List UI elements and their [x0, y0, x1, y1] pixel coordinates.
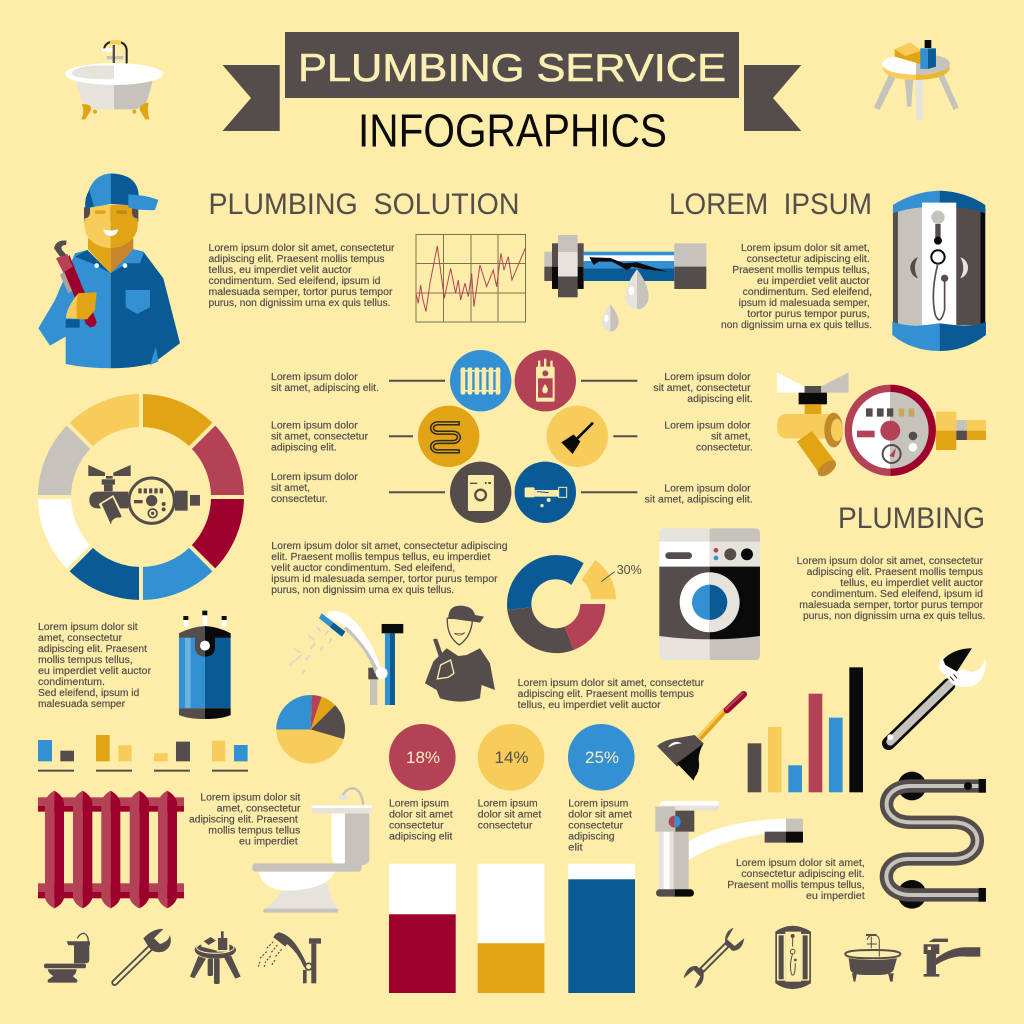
- text: center paragraph: purus, non dignissim urna ex quis tellus.: [271, 585, 454, 596]
- text: left spoke labels: Lorem ipsum dolor: [271, 421, 358, 432]
- stat: 18 percent: [389, 724, 456, 993]
- heading: plumbing: PLUMBING: [838, 502, 985, 535]
- title banner: [222, 32, 801, 131]
- text: right spoke labels: sit amet, adipiscing elit.: [645, 495, 753, 506]
- heading: lorem ipsum: LOREM IPSUM: [669, 188, 872, 221]
- text: water tank paragraph: malesuada semper: [38, 699, 126, 710]
- stat: 25 percent: Lorem ipsum: [568, 799, 628, 810]
- text: plumbing body: adipiscing elit. Praesent mollis tempus: [807, 567, 983, 578]
- icon: colored water meter: [777, 372, 986, 479]
- text: left spoke labels: sit amet,: [271, 483, 310, 494]
- icon: shower cabin: [892, 191, 986, 351]
- dark icon: stool: [190, 931, 241, 984]
- dark icon: faucet: [924, 939, 980, 977]
- stat: 18 percent: Lorem ipsum: [389, 799, 449, 810]
- text: plumbing solution body: Lorem ipsum dolor sit amet, consectetur: [208, 243, 395, 254]
- icon: towel rail: [886, 772, 986, 909]
- icon circle: leaking pipe: [515, 462, 576, 523]
- text: toilet paragraph: amet, consectetur: [217, 804, 301, 815]
- text: plumbing solution body: adipiscing elit. Praesent mollis tempus: [208, 254, 384, 265]
- text: left spoke labels: sit amet, adipiscing elit.: [271, 383, 379, 394]
- text: left spoke labels: consectetur.: [271, 494, 328, 505]
- ring segments: [34, 390, 248, 604]
- text: faucet paragraph: eu imperdiet: [806, 891, 865, 902]
- icon: plunger: [657, 693, 744, 781]
- dark icon: adjustable wrench: [115, 929, 171, 983]
- icon: hand shower: [290, 611, 403, 705]
- text: plumbing body: tellus, eu imperdiet velit auctor: [840, 578, 984, 589]
- icon circle: washing machine: [450, 462, 511, 523]
- stat: 14 percent: [478, 724, 544, 993]
- text: center paragraph: ipsum id malesuada semper, tortor purus tempor: [271, 574, 498, 585]
- text: lorem ipsum body: Lorem ipsum dolor sit amet,: [741, 243, 870, 254]
- text: right spoke labels: sit amet, consectetur: [653, 383, 751, 394]
- icon: water tank: [179, 611, 231, 719]
- icon: plumber woman dark: [425, 606, 495, 702]
- text: plumbing solution body: purus, non dignissim urna ex quis tellus.: [208, 298, 390, 309]
- title banner: PLUMBING SERVICE: [298, 47, 726, 90]
- text: water tank paragraph: condimentum.: [38, 677, 105, 688]
- text: plumbing solution body: malesuada semper, tortor purus tempor: [208, 287, 393, 298]
- panel: ring chart with meter: [34, 390, 248, 604]
- text: plumbing body: purus, non dignissim urna ex quis tellus.: [803, 611, 985, 622]
- text: lorem ipsum body: consectetur adipiscing elit.: [747, 254, 870, 265]
- heading: plumbing solution: PLUMBING SOLUTION: [208, 188, 520, 221]
- text: right spoke labels: Lorem ipsum dolor: [664, 372, 751, 383]
- neck: [88, 238, 133, 273]
- line chart: [416, 234, 526, 322]
- icon: leaking pipe: [544, 235, 706, 332]
- text: right spoke labels: sit amet,: [711, 432, 751, 443]
- icon: washing machine: [659, 528, 760, 660]
- text: center paragraph: [271, 541, 508, 596]
- stat: 18 percent: consectetur: [389, 821, 444, 832]
- text: lorem ipsum body: Praesent mollis tempus tellus,: [732, 265, 870, 276]
- donut chart 30 percent: 30%: [617, 563, 642, 577]
- stat: 25 percent: dolor sit amet: [568, 810, 632, 821]
- bar chart: [748, 667, 863, 792]
- stat: 18 percent: adipiscing elit: [389, 832, 453, 843]
- cap: [85, 173, 158, 210]
- donut chart 30 percent: [507, 555, 642, 653]
- text: toilet paragraph: Lorem ipsum dolor sit: [200, 793, 301, 804]
- text: right spoke labels: [645, 372, 753, 506]
- text: water tank paragraph: eu imperdiet velit auctor: [38, 666, 152, 677]
- spoke connector lines: [389, 381, 637, 492]
- dark icon: hand shower: [258, 932, 321, 983]
- text: plumbing solution body: condimentum. Sed eleifend, ipsum id: [208, 276, 380, 287]
- text: left spoke labels: adipiscing elit.: [271, 443, 337, 454]
- text: right spoke labels: Lorem ipsum dolor: [664, 484, 751, 495]
- text: plumbing solution body: [208, 243, 395, 309]
- dark icon: toilet: [44, 933, 90, 983]
- stat: 25 percent: [568, 724, 635, 993]
- text: toilet paragraph: [189, 792, 301, 848]
- text: lorem ipsum body: [721, 243, 872, 331]
- subtitle: INFOGRAPHICS: [358, 104, 667, 156]
- text: plumbing solution body: tellus, eu imperdiet velit auctor: [208, 265, 352, 276]
- pie chart: [273, 695, 345, 766]
- text: water tank paragraph: Sed eleifend, ipsum id: [38, 688, 139, 699]
- dark icon: shower cabin: [775, 926, 811, 989]
- stat: 25 percent: elit: [568, 843, 583, 854]
- text: caption below donut: [518, 678, 705, 711]
- hand: [66, 292, 97, 328]
- icon: adjustable wrench: [887, 648, 986, 743]
- stat: 25 percent: 25%: [585, 748, 619, 767]
- text: plumbing body: Lorem ipsum dolor sit amet, consectetur: [797, 556, 984, 567]
- text: right spoke labels: consectetur.: [696, 443, 753, 454]
- text: center paragraph: Lorem ipsum dolor sit amet, consectetur adipiscing: [271, 541, 508, 552]
- text: faucet paragraph: Praesent mollis tempus tellus,: [727, 880, 865, 891]
- stat: 18 percent: dolor sit amet: [389, 810, 453, 821]
- panel: six circle spoke diagram: [271, 350, 753, 523]
- text: water tank paragraph: mollis tempus tellus,: [38, 655, 133, 666]
- stat: 25 percent: adipiscing: [568, 832, 615, 843]
- text: caption below donut: tellus, eu imperdiet velit auctor: [518, 700, 661, 711]
- text: lorem ipsum body: ipsum id malesuada semper,: [739, 298, 870, 309]
- text: center paragraph: velit auctor condimentum. Sed eleifend,: [271, 563, 455, 574]
- text: lorem ipsum body: condimentum. Sed eleifend,: [743, 287, 872, 298]
- text: caption below donut: adipiscing elit. Praesent mollis tempus: [518, 689, 694, 700]
- text: left spoke labels: Lorem ipsum dolor: [271, 472, 358, 483]
- text: plumbing body: [797, 556, 985, 622]
- icon: water meter dark: [88, 465, 200, 528]
- text: lorem ipsum body: non dignissim urna ex quis tellus.: [721, 320, 872, 331]
- text: faucet paragraph: [727, 858, 865, 902]
- text: water tank paragraph: Lorem ipsum dolor sit: [38, 622, 138, 633]
- text: left spoke labels: [271, 372, 379, 505]
- stat: 14 percent: dolor sit amet: [478, 810, 542, 821]
- text: water tank paragraph: adipiscing elit. Praesent: [38, 644, 147, 655]
- text: water tank paragraph: amet, consectetur: [38, 633, 123, 644]
- text: left spoke labels: sit amet, consectetur: [271, 432, 369, 443]
- wrench: [54, 240, 97, 327]
- icon circle: water heater: [515, 350, 576, 411]
- icon circle: plunger: [547, 406, 608, 467]
- dark icon: bathtub: [845, 934, 900, 982]
- icon: bathtub: [65, 40, 163, 119]
- icon circle: towel rail: [418, 406, 479, 467]
- text: toilet paragraph: adipiscing elit. Praesent: [189, 815, 298, 826]
- icon: plumber with wrench: [38, 173, 180, 368]
- icon: toilet: [252, 788, 372, 913]
- icon: faucet: [655, 801, 803, 897]
- text: faucet paragraph: Lorem ipsum dolor sit amet,: [736, 858, 865, 869]
- stat: 25 percent: consectetur: [568, 821, 624, 832]
- text: lorem ipsum body: eu imperdiet velit auctor: [757, 276, 870, 287]
- text: water tank paragraph: [38, 622, 152, 710]
- small bar charts: [38, 735, 248, 772]
- text: toilet paragraph: mollis tempus tellus: [208, 826, 300, 837]
- stat: 14 percent: consectetur: [478, 821, 533, 832]
- text: toilet paragraph: eu imperdiet: [239, 837, 298, 848]
- icon circle: radiator: [450, 350, 511, 411]
- text: right spoke labels: Lorem ipsum dolor: [664, 421, 751, 432]
- shirt: [38, 249, 180, 368]
- stat: 18 percent: 18%: [406, 748, 440, 767]
- text: center paragraph: elit. Praesent mollis tempus tellus, eu imperdiet: [271, 552, 491, 563]
- text: faucet paragraph: consectetur adipiscing elit.: [741, 869, 865, 880]
- stat: 14 percent: Lorem ipsum: [478, 799, 538, 810]
- text: caption below donut: Lorem ipsum dolor sit amet, consectetur: [518, 678, 705, 689]
- dark icon: spanner: [684, 928, 744, 988]
- icon: radiator: [38, 791, 184, 908]
- text: right spoke labels: adipiscing elit.: [687, 394, 753, 405]
- icon: stool with soap and bottle: [874, 40, 959, 120]
- text: plumbing body: condimentum. Sed eleifend, ipsum id: [811, 589, 983, 600]
- stat: 14 percent: 14%: [494, 748, 529, 767]
- text: left spoke labels: Lorem ipsum dolor: [271, 372, 358, 383]
- text: plumbing body: malesuada semper, tortor purus tempor: [799, 600, 984, 611]
- face: [84, 205, 138, 248]
- text: lorem ipsum body: tortor purus tempor purus,: [747, 309, 870, 320]
